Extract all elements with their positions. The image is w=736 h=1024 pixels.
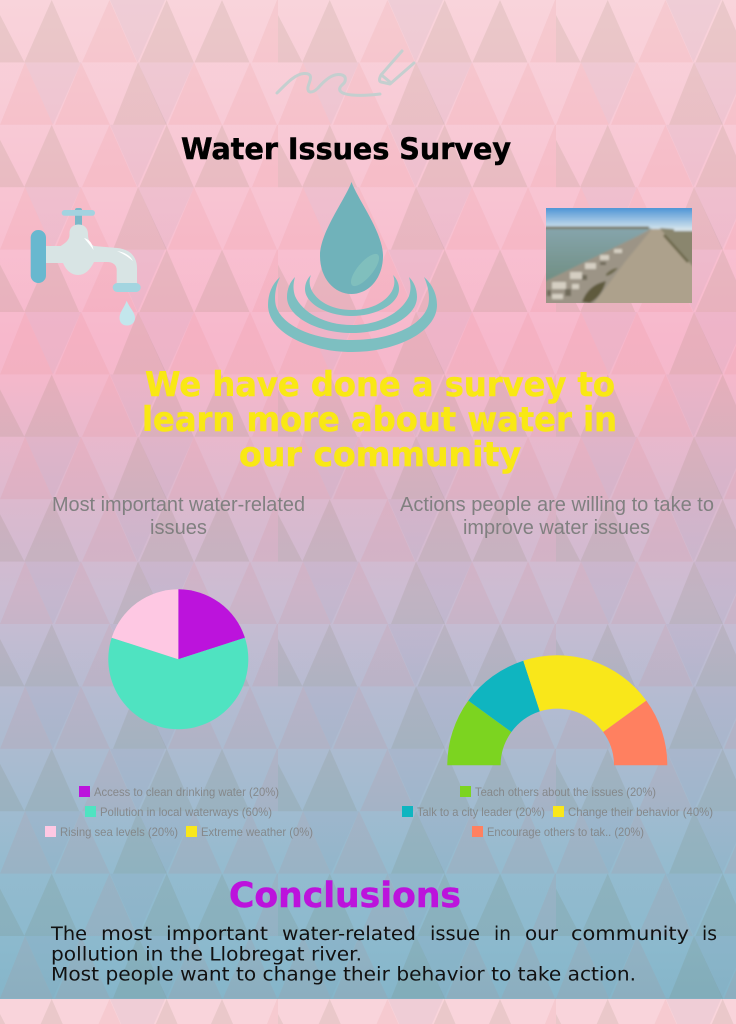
conclusions text: important: [166, 924, 268, 945]
legend: issues chart: [45, 786, 313, 839]
conclusions text: [50, 924, 717, 986]
heading: actions chart: Actions people are willing to take to: [400, 494, 714, 516]
legend: issues chart: Rising sea levels (20%): [60, 826, 178, 839]
subtitle: [142, 365, 617, 475]
icon: faucet: [31, 208, 141, 326]
conclusions text: most: [101, 924, 152, 945]
icon: water drop with ripples: [268, 182, 437, 352]
subtitle: learn more about water in: [142, 400, 617, 440]
conclusions text: pollution in the Llobregat river.: [51, 944, 362, 966]
heading: actions chart: improve water issues: [463, 517, 650, 539]
conclusions text: in: [494, 924, 511, 945]
conclusions text: our: [525, 924, 558, 945]
pie chart: [108, 589, 248, 729]
legend: actions chart: Change their behavior (40%): [568, 806, 713, 819]
semi-donut chart: [447, 655, 667, 765]
subtitle: We have done a survey to: [145, 365, 615, 405]
conclusions text: Most people want to change their behavior to take action.: [51, 964, 636, 986]
bottom pink band: [0, 999, 736, 1024]
heading: issues chart: issues: [150, 517, 207, 539]
conclusions text: is: [702, 924, 717, 945]
conclusions text: issue: [430, 924, 480, 945]
legend: issues chart: Access to clean drinking water (20%): [94, 786, 279, 799]
conclusions heading: Conclusions: [229, 876, 461, 916]
title: Water Issues Survey: [181, 132, 511, 166]
legend: issues chart: Extreme weather (0%): [201, 826, 313, 839]
legend: actions chart: Talk to a city leader (20%): [417, 806, 545, 819]
conclusions text: community: [571, 924, 689, 945]
subtitle: our community: [239, 435, 521, 475]
conclusions text: water-related: [282, 924, 416, 945]
legend: actions chart: Encourage others to tak.. (20%): [487, 826, 644, 839]
heading: issues chart: [52, 494, 305, 539]
legend: actions chart: [402, 786, 713, 839]
legend: actions chart: Teach others about the issues (20%): [475, 786, 656, 799]
photo: river embankment: [546, 208, 692, 303]
legend: issues chart: Pollution in local waterways (60%): [100, 806, 272, 819]
scribble logo: [277, 51, 414, 95]
heading: issues chart: Most important water-related: [52, 494, 305, 516]
conclusions text: The: [50, 924, 87, 945]
heading: actions chart: [400, 494, 714, 539]
